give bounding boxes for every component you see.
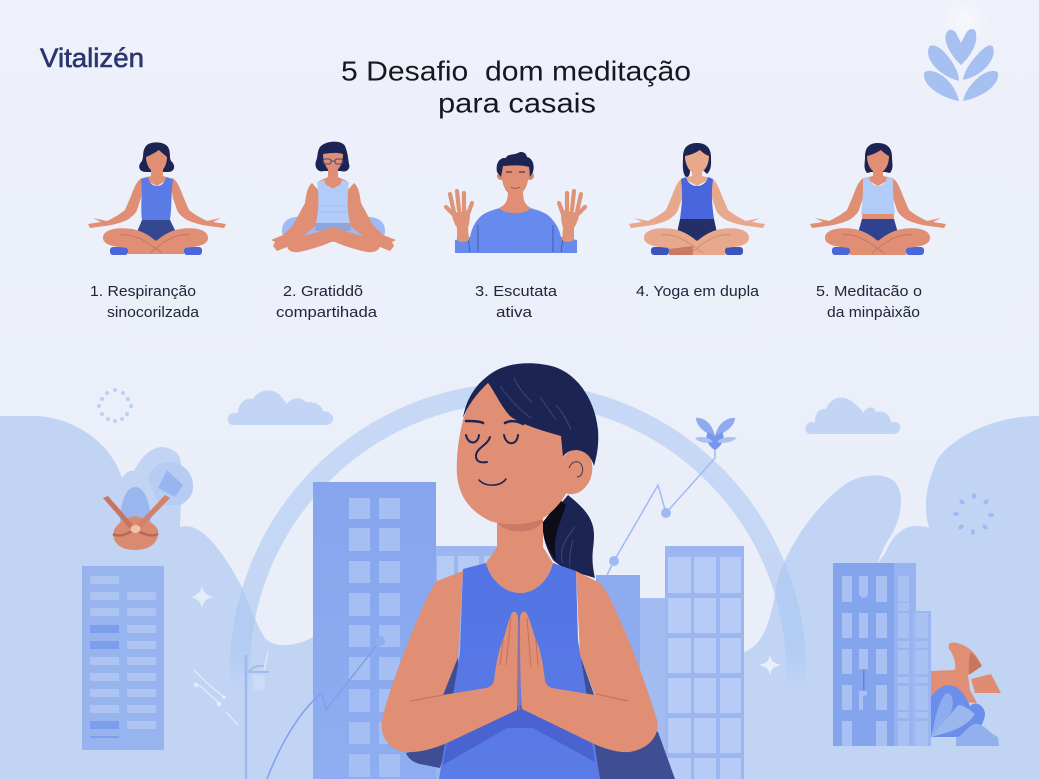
building centre left <box>313 482 436 779</box>
step labels: 1. Respiranção <box>90 283 196 300</box>
hair <box>463 363 598 466</box>
plant right <box>931 643 1001 746</box>
cloud left <box>228 390 333 425</box>
ear <box>560 450 592 494</box>
icon: dotted circle <box>97 388 133 423</box>
line chart left <box>267 636 385 779</box>
title: 5 Desafio dom meditação <box>341 56 691 86</box>
street lamp and sparks <box>194 610 274 779</box>
title <box>341 56 691 118</box>
step labels: da minpàixão <box>827 304 920 321</box>
building left <box>82 566 164 750</box>
arch <box>240 393 796 692</box>
figure 1: seated woman, blue tank <box>88 142 226 255</box>
face <box>457 383 568 524</box>
back arms shadow <box>406 657 460 768</box>
arm right with hand <box>520 571 658 752</box>
ponytail <box>543 495 595 578</box>
step labels: 2. Gratiddõ <box>283 283 363 300</box>
line chart right with flower <box>607 418 737 575</box>
icon: backpack with pale blob <box>103 462 193 550</box>
background hills and ground <box>0 416 1039 779</box>
step labels: 3. Escutata <box>475 283 558 300</box>
main figure: meditating woman <box>382 363 675 779</box>
building right <box>833 563 931 746</box>
figure 3: man with raised hands <box>446 152 585 253</box>
neck <box>486 515 553 593</box>
figure 4: seated woman, dark blue tank <box>629 143 765 255</box>
icon: dashed sun <box>953 493 994 535</box>
eyes, brows, nose, mouth <box>466 421 523 485</box>
step labels <box>90 283 922 321</box>
arm left with hand <box>382 571 518 752</box>
building centre rear <box>436 546 506 779</box>
figure 5: seated woman, light crop top <box>810 143 946 255</box>
step labels: ativa <box>496 304 533 321</box>
sparkle left <box>191 585 214 609</box>
torso: blue tank top <box>439 563 600 779</box>
title: para casais <box>438 88 596 118</box>
sparkle right <box>759 654 781 676</box>
building centre right <box>596 546 744 779</box>
cloud right <box>805 398 900 434</box>
icon: leaf logo <box>924 29 998 101</box>
step labels: 5. Meditacão o <box>816 283 922 300</box>
figure 2: seated woman with glasses, cushion <box>271 142 396 252</box>
step labels: compartihada <box>276 304 378 321</box>
step labels: 4. Yoga em dupla <box>636 283 760 300</box>
logo: Vitalizén: Vitalizén <box>40 43 144 73</box>
step labels: sinocorilzada <box>107 304 200 321</box>
